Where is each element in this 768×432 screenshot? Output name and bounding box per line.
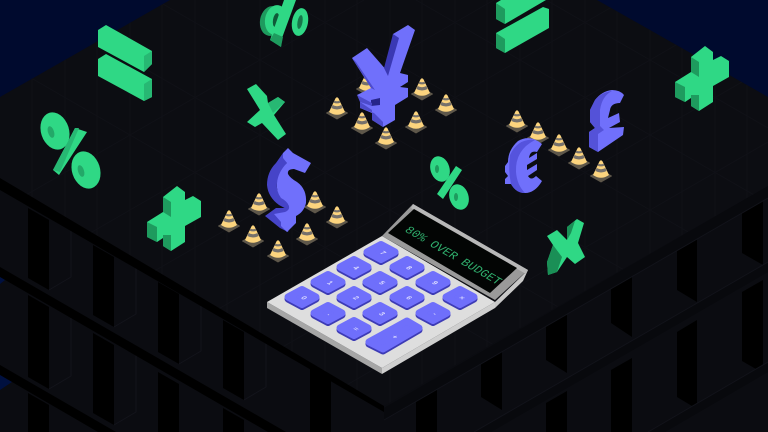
calculator key labels: .: [325, 312, 333, 317]
calculator key labels: +: [389, 334, 399, 340]
calculator display frame: [382, 204, 528, 300]
building walls: [0, 170, 768, 432]
calculator key labels: 8: [404, 266, 413, 271]
green plus left: [147, 186, 201, 251]
green equals sign top: [496, 0, 549, 53]
dollar symbol: [265, 148, 311, 232]
calculator key labels: 0: [299, 296, 308, 301]
traffic cones: euro group: [506, 110, 612, 182]
pound symbol: [589, 90, 624, 152]
traffic cones: yen group (behind): [326, 73, 456, 149]
traffic cones: dollar group: [218, 191, 348, 262]
calculator key labels: 4: [351, 266, 360, 271]
calculator: [267, 204, 528, 374]
green percent top: [258, 0, 310, 47]
display readout: 80% OVER BUDGET: [401, 224, 505, 288]
calculator key labels: [299, 251, 466, 340]
calculator key labels: =: [350, 326, 360, 332]
green percent middle: [427, 154, 472, 212]
green percent left: [36, 109, 105, 192]
green multiply sign right: [547, 219, 585, 275]
calculator body: [267, 236, 528, 374]
euro symbol: [505, 138, 542, 193]
calculator key labels: -: [430, 312, 439, 317]
calculator key labels: 7: [378, 251, 387, 256]
yen symbol: [352, 25, 415, 127]
green equals sign left: [98, 25, 152, 101]
sky gaps at left edge: [0, 277, 12, 390]
calculator key labels: 3: [377, 312, 386, 317]
calculator key labels: 1: [325, 281, 334, 286]
calculator key labels: 9: [430, 281, 439, 286]
calculator key labels: ×: [456, 295, 466, 301]
calculator key labels: 5: [377, 281, 386, 286]
left wall floor bands: [0, 178, 384, 432]
left wall windows: [28, 208, 331, 432]
right wall floor bands: [384, 186, 768, 432]
calculator key tops: [288, 244, 474, 349]
green plus right: [675, 46, 729, 111]
calculator key labels: 2: [351, 296, 360, 301]
left wall window frames: [49, 228, 266, 425]
green multiply sign left: [247, 84, 286, 140]
calculator key labels: 6: [404, 296, 413, 301]
calculator key shadows: [288, 246, 474, 351]
right wall windows: [416, 195, 763, 432]
